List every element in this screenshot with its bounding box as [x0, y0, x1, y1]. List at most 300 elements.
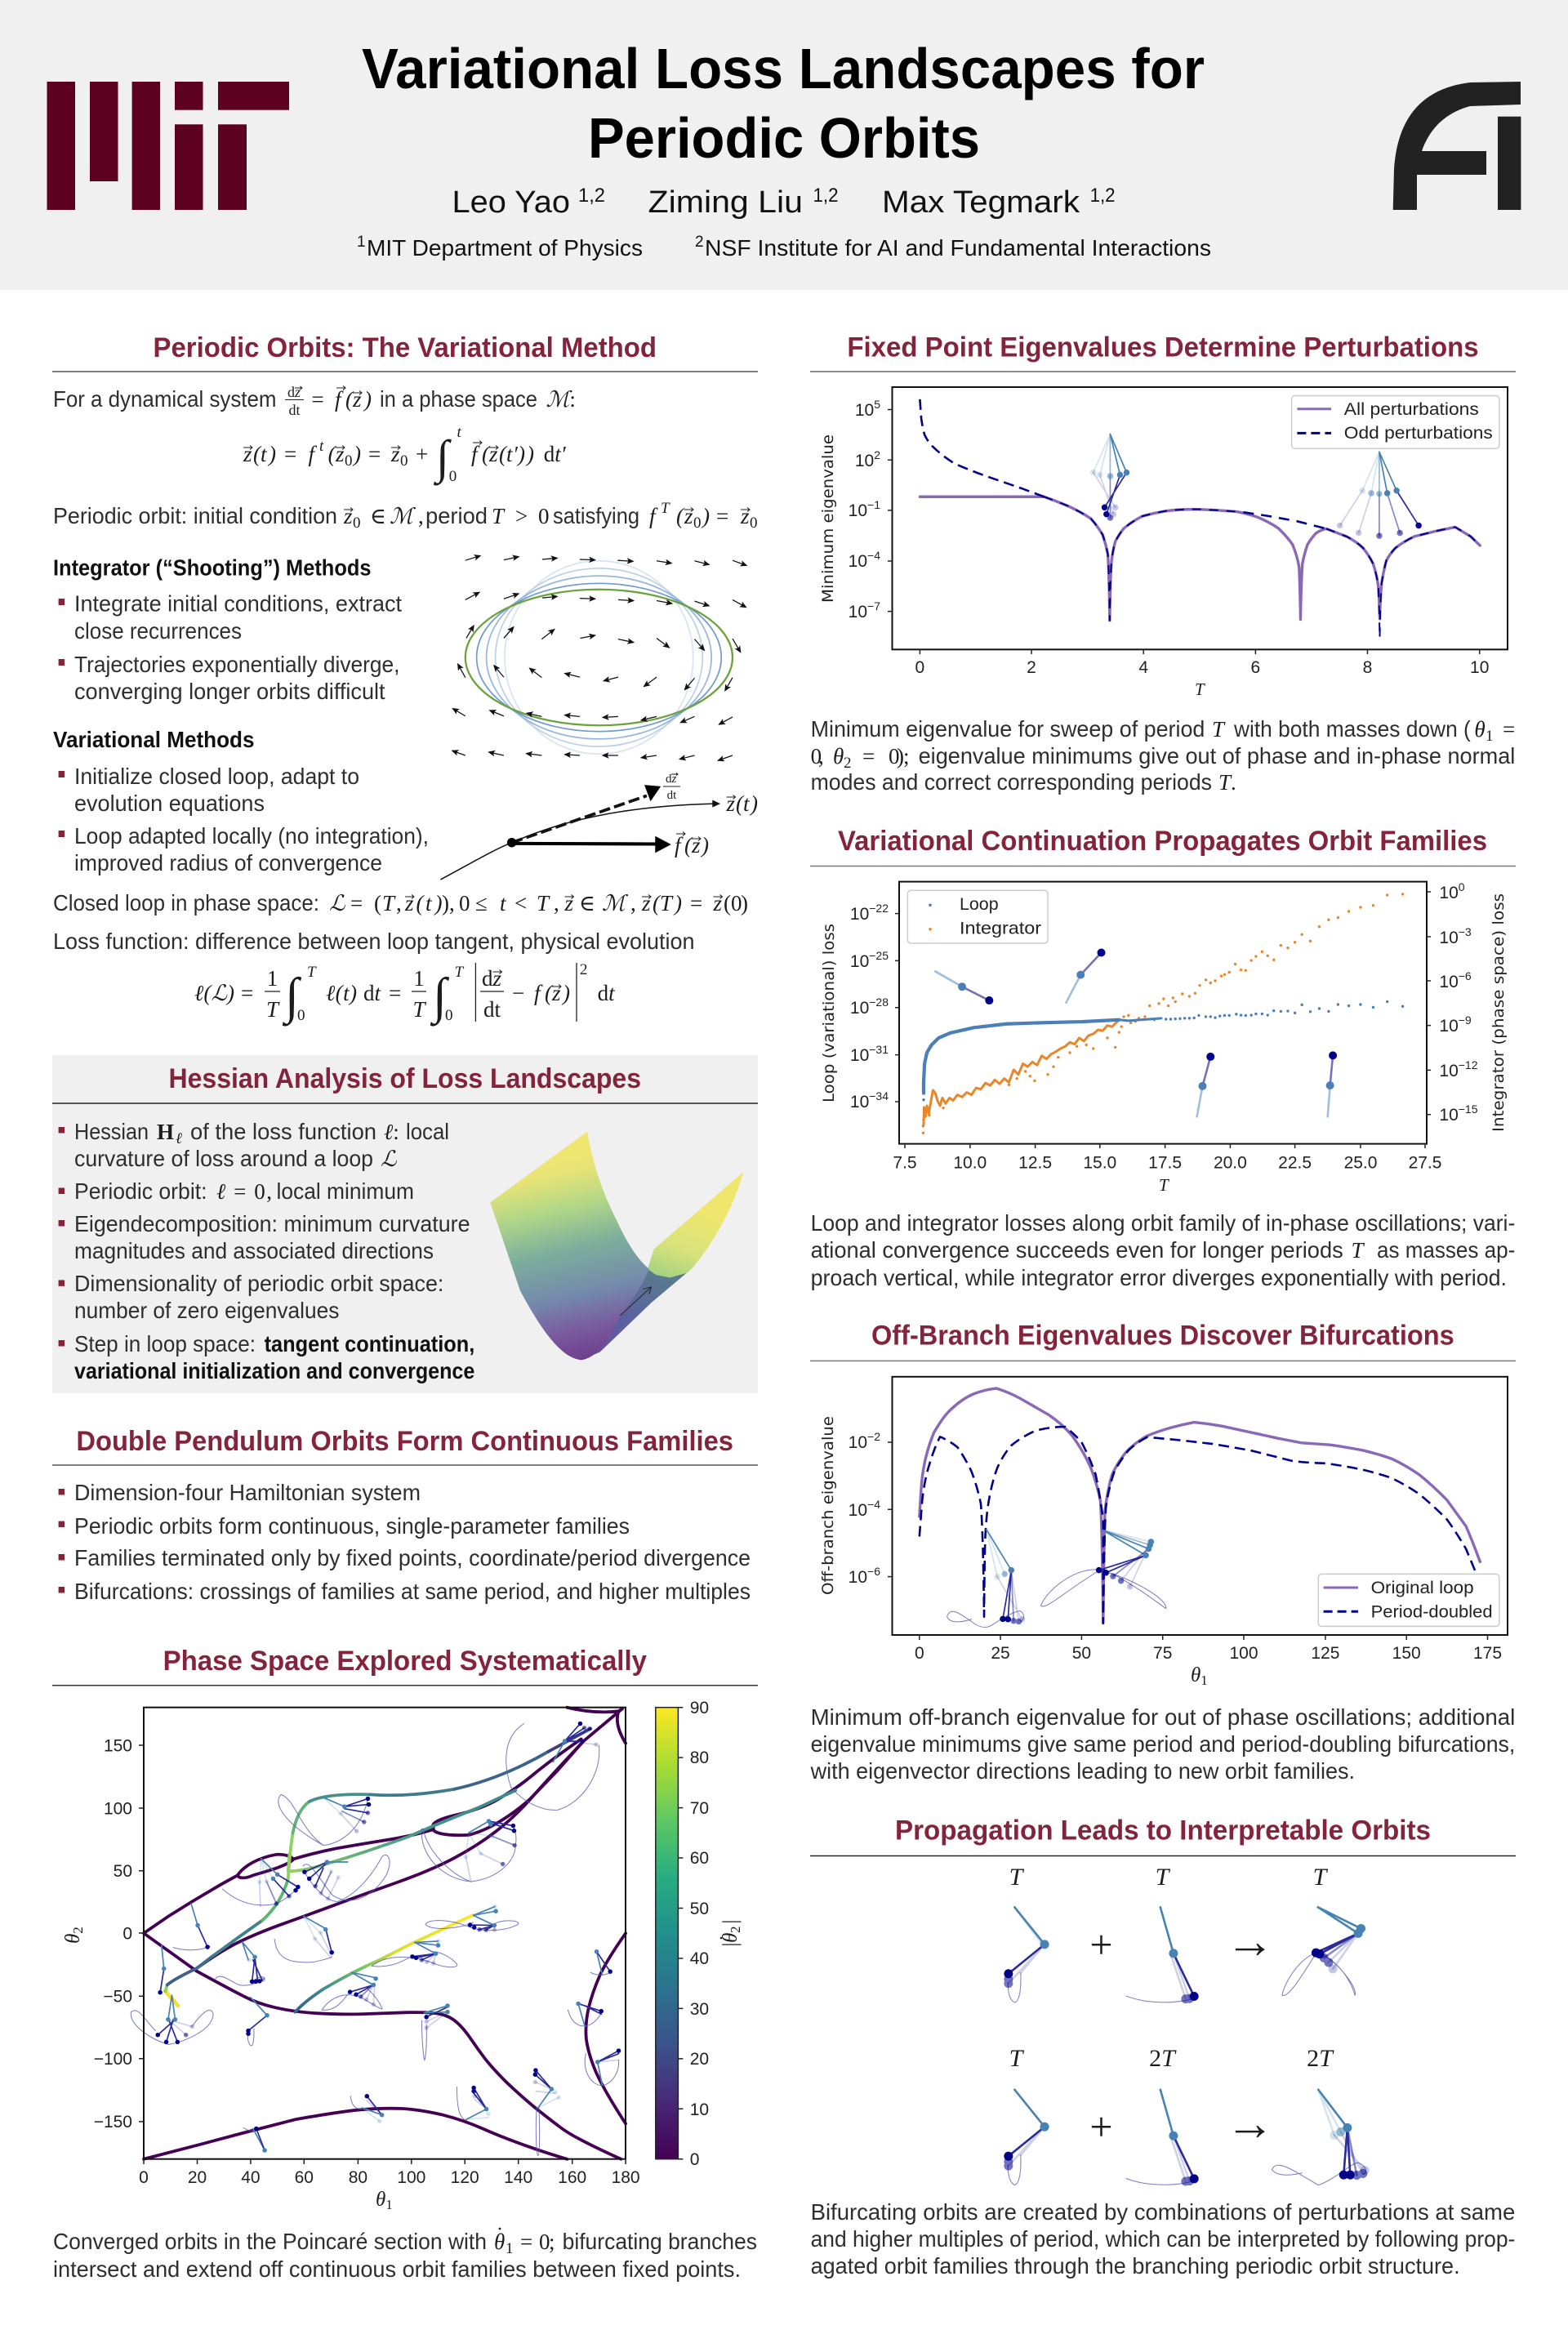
axes ticks and labels: 2 — [874, 448, 880, 461]
axes ticks and labels: 10 — [855, 452, 874, 470]
IAIFI logo — [1393, 82, 1521, 210]
header band — [0, 0, 1568, 290]
caption: T — [1351, 1238, 1365, 1263]
closed loop definition: (0) — [724, 891, 748, 915]
bifurcation orbit glyphs — [1008, 1907, 1366, 2185]
caption: Minimum eigenvalue for sweep of period — [811, 716, 1205, 742]
variational methods text: improved radius of convergence — [74, 850, 382, 875]
axes ticks and labels: 10 — [855, 401, 874, 420]
axes ticks and labels: −6 — [1459, 969, 1472, 982]
periodic orbit definition: 0 — [353, 514, 361, 532]
orbit glyph — [222, 1859, 298, 1907]
orbit glyph: row 1 a — [1008, 1907, 1045, 2002]
caption: T — [1212, 717, 1226, 742]
equation: loss: = — [389, 981, 401, 1005]
x axis: 40 — [241, 2168, 261, 2187]
period labels and operators: → — [1225, 2096, 1274, 2150]
equation: flow: t — [457, 424, 462, 441]
affiliations: 1 — [357, 234, 366, 251]
integrator methods text — [53, 555, 402, 704]
axes ticks and labels: 25.0 — [1344, 1153, 1377, 1173]
intro line: ℳ: — [546, 387, 576, 412]
caption: Bifurcating orbits are created by combinations of perturbations at same — [811, 2199, 1515, 2225]
orbit glyph: row 2 a — [1008, 2090, 1045, 2185]
orbit glyph: row 1 c — [1282, 1907, 1361, 1996]
hessian bullets: local — [406, 1119, 449, 1144]
caption: proach vertical, while integrator error diverges exponentially with period. — [811, 1265, 1507, 1290]
axes ticks and labels: −4 — [867, 1498, 880, 1511]
heading: Variational Continuation Propagates Orbit Families — [838, 826, 1487, 857]
periodic orbit definition: 0 — [693, 514, 701, 532]
colorbar: 30 — [690, 2000, 709, 2019]
heading: Double Pendulum Orbits Form Continuous Families — [76, 1426, 733, 1457]
closed loop definition: ℒ — [329, 891, 345, 915]
variational methods text — [53, 727, 429, 875]
equation: loss: 1 — [413, 966, 425, 991]
closed loop definition: ℳ — [602, 891, 629, 915]
x axis: 180 — [612, 2168, 640, 2187]
panel: interpretable orbits — [810, 1815, 1516, 2278]
equation: loss: ∫ — [430, 969, 450, 1027]
periodic orbit definition: = — [716, 504, 728, 528]
periodic orbit definition: ℳ — [390, 504, 416, 528]
x axis: 100 — [397, 2168, 425, 2187]
variational methods text: Variational Methods — [53, 727, 255, 752]
y axis: −100 — [94, 2050, 132, 2069]
axes ticks and labels: 15.0 — [1083, 1153, 1116, 1173]
colorbar: 50 — [690, 1900, 709, 1918]
axes ticks and labels: 20.0 — [1214, 1153, 1247, 1173]
orbit glyph — [425, 1907, 519, 1931]
hessian bullets: Eigendecomposition: minimum curvature — [74, 1211, 470, 1236]
equation: loss: T — [266, 997, 280, 1022]
equation: flow: 0 — [345, 452, 353, 470]
axes ticks and labels: 2 — [1027, 658, 1036, 677]
heading: Fixed Point Eigenvalues Determine Perturbations — [847, 332, 1479, 363]
hessian bullets: ℓ: — [384, 1120, 399, 1144]
axes ticks and labels: 17.5 — [1148, 1153, 1182, 1173]
period labels and operators — [1009, 1864, 1334, 2150]
title: Periodic Orbits — [588, 106, 980, 170]
axes ticks and labels: T — [1195, 679, 1205, 699]
hessian bullets: H — [157, 1120, 174, 1144]
x axis: 140 — [504, 2168, 532, 2187]
axes ticks and labels — [819, 398, 1489, 699]
tangent vs evolution diagram: f(z) — [675, 833, 709, 858]
closed loop definition: < — [514, 891, 527, 915]
periodic orbit definition: 0 — [750, 514, 758, 532]
panel: variational continuation — [810, 826, 1516, 1290]
orbit glyph — [947, 1530, 1024, 1628]
caption: =0; — [520, 2230, 555, 2254]
scatter points — [923, 894, 1403, 1133]
x axis: 160 — [558, 2168, 586, 2187]
tangent vs evolution diagram: dt — [667, 789, 677, 802]
caption: 2 — [844, 755, 851, 772]
orbit glyph — [568, 2003, 601, 2027]
colorbar — [656, 1699, 743, 2169]
caption: with both masses down ( — [1233, 716, 1471, 742]
intro line: f(z) — [335, 387, 372, 412]
closed loop definition: , — [554, 891, 559, 915]
periodic orbit definition: z — [740, 504, 750, 528]
curves — [920, 1388, 1480, 1628]
axes ticks and labels: 10 — [1439, 973, 1459, 991]
legend: All perturbations — [1344, 400, 1479, 419]
hessian bullets: ℒ — [381, 1147, 397, 1171]
caption: Converged orbits in the Poincaré section with — [53, 2229, 487, 2254]
periodic orbit definition: T — [661, 500, 670, 517]
axes ticks and labels: 1 — [1200, 1673, 1208, 1688]
axes ticks and labels: 10 — [849, 1433, 867, 1452]
period labels and operators: 2T — [1307, 2045, 1334, 2072]
caption: intersect and extend off continuous orbit families between fixed points. — [53, 2256, 741, 2282]
equation: loss: dt — [598, 981, 616, 1005]
equation: flow: = — [284, 442, 296, 466]
off-branch line chart — [819, 1377, 1508, 1688]
authors: Ziming Liu — [648, 185, 803, 220]
axes ticks and labels: −7 — [867, 599, 880, 612]
x axis: θ — [376, 2189, 385, 2211]
orbit glyph — [243, 2128, 265, 2150]
axes ticks and labels: 10 — [850, 999, 869, 1018]
caption: Loop and integrator losses along orbit family of in-phase oscillations; vari- — [811, 1210, 1515, 1236]
heading: Hessian Analysis of Loss Landscapes — [168, 1063, 641, 1094]
orbit glyph — [350, 2096, 382, 2121]
period labels and operators: T — [1313, 1864, 1329, 1891]
x axis: 0 — [139, 2168, 149, 2187]
axes ticks and labels: 0 — [1459, 880, 1465, 893]
y axis: 0 — [122, 1924, 132, 1944]
orbit glyph: row 2 b — [1126, 2090, 1194, 2185]
orbit glyph — [322, 1972, 382, 2010]
axes ticks and labels: 6 — [1251, 658, 1260, 677]
axes ticks and labels: 10 — [850, 905, 869, 924]
axes ticks and labels: −4 — [867, 549, 880, 562]
axes ticks and labels: 4 — [1138, 658, 1148, 677]
closed loop definition: , — [630, 891, 636, 915]
caption: ational convergence succeeds even for longer periods — [811, 1237, 1343, 1263]
variational methods text: evolution equations — [74, 791, 265, 816]
equation: flow: 0 — [400, 452, 408, 470]
axes ticks and labels: 100 — [1229, 1644, 1258, 1663]
axes ticks and labels: −12 — [1459, 1058, 1478, 1071]
caption: = — [1503, 717, 1515, 742]
x axis: 60 — [295, 2168, 314, 2187]
axes ticks and labels: 5 — [874, 398, 880, 411]
closed loop definition: = — [690, 891, 702, 915]
period labels and operators: 2T — [1149, 2045, 1177, 2072]
hessian bullets: number of zero eigenvalues — [74, 1298, 339, 1323]
axes ticks and labels: −15 — [1459, 1102, 1478, 1116]
axes ticks and labels: 22.5 — [1278, 1153, 1312, 1173]
axes ticks and labels: 125 — [1311, 1644, 1339, 1663]
equation: loss: 2 — [580, 961, 588, 978]
colorbar: 90 — [690, 1699, 709, 1717]
axes ticks and labels: 75 — [1153, 1644, 1172, 1663]
closed loop definition: t — [500, 891, 507, 915]
affiliations: MIT Department of Physics — [367, 235, 643, 261]
orbit glyph — [535, 2070, 559, 2156]
caption: as masses ap- — [1377, 1237, 1515, 1263]
orbit glyph — [160, 1945, 164, 1993]
orbit glyph — [506, 1724, 599, 1810]
orbit family curves — [131, 1708, 626, 2159]
orbit glyph — [247, 1998, 267, 2046]
curves — [920, 399, 1480, 638]
y axis: −150 — [94, 2113, 132, 2132]
x axis — [139, 2159, 640, 2212]
legend: Integrator — [960, 920, 1041, 938]
closed loop definition: ∈ — [579, 891, 595, 915]
x axis: 1 — [385, 2197, 393, 2212]
equation: flow: f(z(t′)) — [471, 442, 534, 466]
axes ticks and labels: θ — [1191, 1664, 1200, 1686]
axes ticks and labels: 10 — [849, 501, 867, 520]
caption: T. — [1218, 770, 1236, 795]
family bullets: Dimension-four Hamiltonian system — [74, 1480, 421, 1505]
closed loop definition: z — [564, 891, 573, 915]
intro line: in a phase space — [380, 386, 537, 412]
caption — [810, 1704, 1515, 1784]
legend: Period-doubled — [1371, 1602, 1493, 1621]
equation: flow: z — [390, 442, 400, 466]
tangent vs evolution diagram — [440, 773, 758, 880]
caption: eigenvalue minimums give out of phase and in-phase normal — [919, 743, 1515, 768]
orbit glyph — [1094, 434, 1127, 518]
MIT logo — [47, 82, 289, 210]
equation: flow: + — [416, 442, 428, 466]
equation: loss: f(z) — [534, 981, 570, 1005]
caption: agated orbit families through the branching periodic orbit structure. — [811, 2253, 1460, 2278]
caption: bifurcating branches — [563, 2229, 757, 2254]
orbit glyph — [274, 1916, 332, 1962]
caption — [811, 2199, 1515, 2278]
axes ticks and labels: Off-branch eigenvalue — [819, 1416, 837, 1595]
periodic orbit definition: , — [418, 504, 424, 528]
orbit glyph — [421, 2006, 448, 2060]
periodic orbit definition: satisfying — [553, 503, 639, 528]
axes ticks and labels: 10 — [1439, 1106, 1459, 1125]
vector field with loops — [452, 555, 746, 760]
periodic orbit definition: Periodic orbit: initial condition — [53, 503, 337, 528]
legend — [1292, 395, 1499, 448]
legend: Loop — [960, 895, 999, 914]
axes ticks and labels: 10 — [1439, 1017, 1459, 1036]
axes ticks and labels: −9 — [1459, 1013, 1472, 1027]
x axis: 20 — [188, 2168, 207, 2187]
equation: loss: T — [455, 964, 465, 981]
period labels and operators: T — [1009, 2045, 1025, 2072]
closed loop definition: 0≤ — [459, 891, 488, 915]
caption: θ — [494, 2230, 505, 2254]
periodic orbit definition: T — [492, 504, 506, 528]
axes ticks and labels: −6 — [867, 1565, 880, 1578]
x axis: 80 — [349, 2168, 368, 2187]
caption — [811, 1210, 1515, 1290]
heading: Off-Branch Eigenvalues Discover Bifurcations — [871, 1321, 1454, 1352]
eigenvalue line chart — [819, 387, 1508, 699]
authors: Leo Yao — [452, 185, 570, 220]
colorbar: 20 — [690, 2050, 709, 2069]
intro line: For a dynamical system — [53, 386, 276, 412]
equation: flow: ∫ — [433, 430, 452, 486]
equation: flow: (z — [328, 442, 345, 466]
panel: periodic orbits variational method — [52, 332, 758, 1027]
loss function text: Loss function: difference between loop tangent, physical evolution — [53, 929, 694, 954]
axes ticks and labels: 8 — [1363, 658, 1372, 677]
family bullets: Periodic orbits form continuous, single-parameter families — [74, 1513, 630, 1539]
axes ticks and labels: −34 — [869, 1089, 889, 1102]
y axis: 50 — [114, 1862, 132, 1881]
variational methods text: Initialize closed loop, adapt to — [74, 764, 359, 789]
closed loop definition: z(T) — [641, 891, 682, 915]
equation: flow: t — [319, 438, 324, 455]
y axis: 100 — [104, 1800, 132, 1818]
period labels and operators: → — [1225, 1914, 1274, 1968]
caption — [811, 716, 1515, 795]
tangent vs evolution diagram: dz — [666, 773, 676, 786]
axes ticks and labels: 10 — [1439, 884, 1459, 902]
axes ticks and labels: −22 — [869, 902, 889, 915]
orbit glyph: row 2 c — [1272, 2090, 1366, 2185]
title — [362, 37, 1205, 170]
axes ticks and labels: −2 — [867, 1430, 880, 1443]
periodic orbit definition: period — [425, 503, 488, 528]
y axis: −50 — [103, 1988, 132, 2006]
heading: Propagation Leads to Interpretable Orbits — [895, 1815, 1431, 1846]
panel: hessian analysis — [52, 1055, 758, 1393]
orbit glyphs — [935, 952, 1333, 1116]
orbit glyph — [590, 1952, 610, 1975]
axes ticks and labels: −1 — [867, 498, 880, 511]
caption: =0); — [862, 744, 910, 768]
colorbar: 40 — [690, 1949, 709, 1968]
equation: loss: dt — [363, 981, 382, 1005]
axes ticks and labels: 10 — [1439, 1062, 1459, 1080]
family bullets — [59, 1480, 751, 1604]
affiliations — [357, 234, 1211, 261]
panel: double pendulum families — [52, 1426, 758, 1604]
hessian bullets — [59, 1119, 474, 1383]
period labels and operators: + — [1089, 2104, 1113, 2149]
equation: flow: f — [309, 442, 317, 466]
equation: loss: T — [307, 964, 317, 981]
legend: Original loop — [1371, 1579, 1474, 1597]
closed loop definition — [53, 890, 748, 915]
colorbar: |θ — [719, 1933, 742, 1948]
axes ticks and labels — [819, 1416, 1502, 1688]
family bullets: Bifurcations: crossings of families at same period, and higher multiples — [74, 1579, 751, 1604]
axes ticks and labels: −25 — [869, 949, 889, 962]
integrator methods text: close recurrences — [74, 618, 242, 644]
caption: θ — [833, 744, 844, 768]
closed loop definition: z — [712, 891, 722, 915]
loss landscape surface — [490, 1132, 743, 1360]
axes ticks and labels: 12.5 — [1018, 1153, 1052, 1173]
equation: flow: ) — [352, 442, 361, 466]
periodic orbit definition: z — [343, 504, 353, 528]
equation: loss: = — [241, 981, 253, 1005]
axes ticks and labels: 175 — [1473, 1644, 1502, 1663]
affiliations: 2 — [695, 234, 704, 251]
closed loop definition: T — [537, 891, 550, 915]
caption: eigenvalue minimums give same period and period-doubling bifurcations, — [811, 1731, 1515, 1757]
y axis — [62, 1736, 144, 2132]
caption: 0, — [811, 744, 824, 768]
intro line — [53, 384, 576, 418]
authors — [452, 185, 1116, 220]
hessian bullets: curvature of loss around a loop — [74, 1146, 373, 1171]
orbit glyph: row 1 b — [1126, 1907, 1194, 2002]
y axis: θ — [62, 1934, 84, 1944]
orbit glyph — [1340, 452, 1419, 536]
axes ticks and labels: −31 — [869, 1043, 889, 1056]
hessian bullets: ℓ = 0, — [216, 1179, 272, 1204]
equation: loss — [194, 961, 616, 1027]
axes ticks and labels: Loop (variational) loss — [820, 924, 838, 1102]
axes ticks and labels: 10 — [850, 1093, 869, 1111]
intro line: dt — [288, 402, 301, 418]
axes ticks and labels: 10 — [1439, 929, 1459, 947]
affiliations: NSF Institute for AI and Fundamental Interactions — [705, 235, 1211, 261]
orbit glyph — [585, 2051, 619, 2086]
periodic orbit definition: (z — [676, 504, 693, 528]
variational methods text: Loop adapted locally (no integration), — [74, 823, 429, 849]
closed loop definition: Closed loop in phase space: — [53, 890, 319, 915]
intro line: = — [312, 387, 324, 412]
integrator methods text: Integrator (“Shooting”) Methods — [53, 555, 371, 581]
axes ticks and labels: 10 — [849, 1568, 867, 1587]
periodic orbit definition: ) — [701, 504, 710, 528]
hessian bullets: tangent continuation, — [265, 1331, 474, 1356]
equation: loss: dt — [483, 997, 501, 1022]
equation: flow: = — [368, 442, 381, 466]
y axis: 2 — [70, 1927, 86, 1934]
equation: loss: ℓ(t) — [326, 981, 357, 1005]
closed loop definition: =( — [350, 891, 381, 915]
legend: Odd perturbations — [1344, 424, 1493, 443]
poincare section plot — [62, 1699, 743, 2212]
hessian bullets: of the loss function — [190, 1119, 376, 1144]
closed loop definition: T — [382, 891, 396, 915]
colorbar: 80 — [690, 1748, 709, 1767]
integrator methods text: Trajectories exponentially diverge, — [74, 652, 400, 677]
panel: fixed point eigenvalues — [810, 332, 1516, 795]
caption: Minimum off-branch eigenvalue for out of phase oscillations; additional — [811, 1704, 1515, 1730]
equation: flow: z(t) — [243, 442, 276, 466]
caption: θ — [1474, 717, 1486, 742]
hessian bullets: Step in loop space: — [74, 1331, 256, 1356]
axes ticks and labels: 0 — [915, 1644, 924, 1663]
legend — [907, 890, 1048, 943]
axes ticks and labels: 10 — [849, 1501, 867, 1520]
colorbar: 10 — [690, 2100, 709, 2119]
intro line: dz — [287, 384, 301, 400]
y axis: 150 — [104, 1736, 132, 1756]
orbit glyph — [457, 2087, 489, 2120]
hessian bullets: ℓ — [176, 1130, 182, 1147]
period labels and operators: T — [1009, 1864, 1025, 1891]
colorbar: 2 — [728, 1926, 743, 1933]
caption: with eigenvector directions leading to new orbit families. — [810, 1758, 1355, 1784]
periodic orbit definition — [53, 500, 758, 532]
family bullets: Families terminated only by fixed points, coordinate/period divergence — [74, 1545, 751, 1570]
caption: 1 — [506, 2240, 513, 2257]
orbit glyph — [1040, 1530, 1166, 1609]
axes ticks and labels: T — [1159, 1175, 1169, 1195]
orbit glyph — [372, 1941, 457, 1967]
